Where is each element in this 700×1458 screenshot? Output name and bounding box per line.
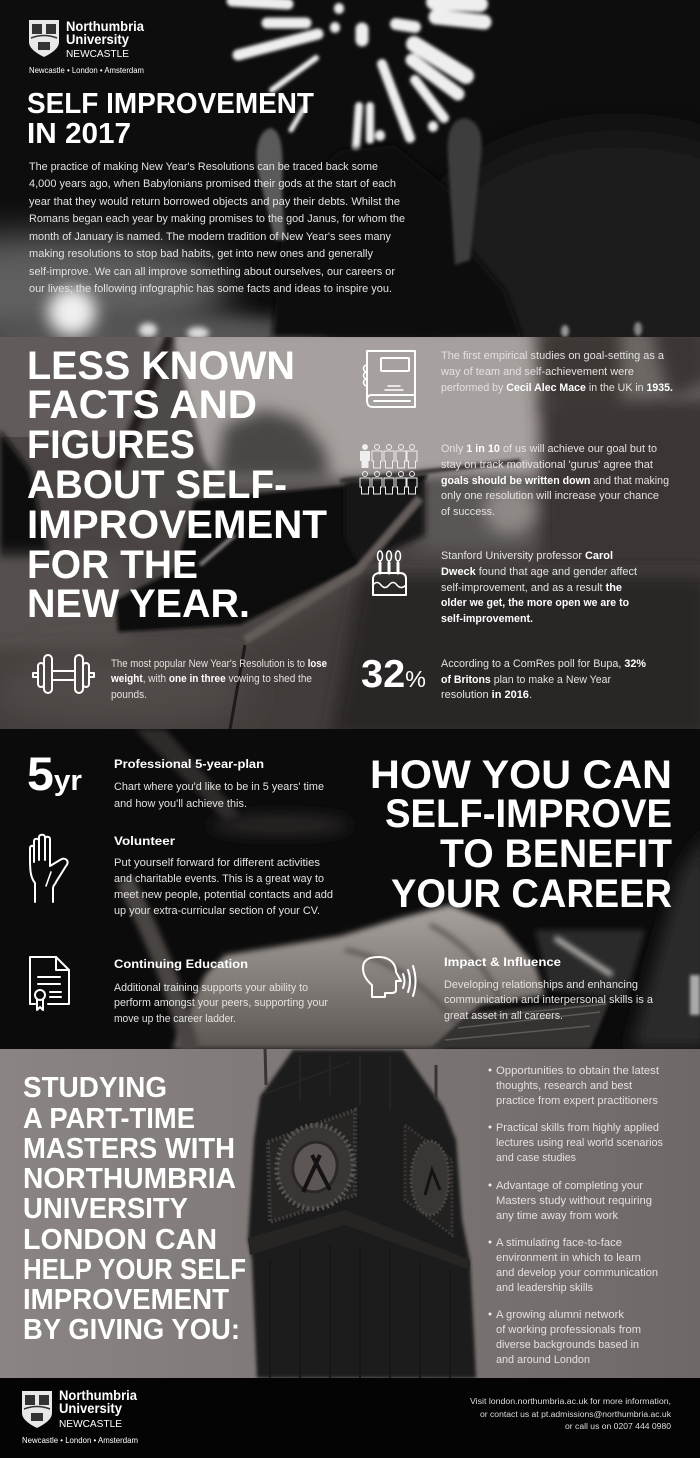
text block: volunteer: meet new people, potential contacts and add — [114, 889, 333, 901]
text block: 32 percent poll: of Britons plan to make a New Year — [441, 674, 611, 686]
list: benefits: and develop your communication — [496, 1267, 658, 1279]
heading: less known facts: FACTS AND — [27, 383, 257, 427]
text block: intro: year that they would return borrowed objects and pay their debts. Whilst the — [29, 196, 400, 208]
text block: 1 in 10: only one resolution will increase your chance — [441, 490, 659, 502]
text block: volunteer: and charitable events. This is a great way to — [114, 873, 324, 885]
text block: contact details: Visit london.northumbria.ac.uk for more information, — [470, 1397, 671, 1406]
text block: professional plan: Chart where you'd like to be in 5 years' time — [114, 781, 324, 793]
text block: impact and influence — [444, 957, 654, 1022]
logo: Northumbria University footer: Newcastle • London • Amsterdam — [22, 1436, 138, 1445]
text block: lose weight: pounds. — [111, 689, 147, 701]
heading: less known facts: FOR THE — [27, 543, 198, 587]
text block: impact and influence: great asset in all careers. — [444, 1010, 563, 1022]
text block: lose weight: weight, with one in three vowing to shed the — [110, 673, 312, 685]
heading: studying a part-time masters: MASTERS WITH — [23, 1133, 235, 1165]
text block: volunteer: up your extra-curricular section of your CV. — [114, 905, 320, 917]
text block: intro: making resolutions to stop bad habits, get into new ones and generally — [29, 248, 373, 260]
list: benefits: any time away from work — [496, 1210, 618, 1222]
list: benefits: and leadership skills — [496, 1282, 593, 1294]
heading: studying a part-time masters: HELP YOUR SELF — [23, 1254, 246, 1286]
text block: lose weight — [110, 658, 327, 701]
heading: how you can self-improve: HOW YOU CAN — [370, 753, 672, 797]
text block: intro — [29, 161, 405, 295]
list: benefits: Practical skills from highly applied — [496, 1122, 659, 1134]
text block: first studies — [440, 350, 673, 394]
heading: studying a part-time masters — [23, 1072, 246, 1346]
icon: ten people, one highlighted — [360, 444, 417, 494]
list: benefits: diverse backgrounds based in — [496, 1339, 639, 1351]
heading: studying a part-time masters: A PART-TIME — [23, 1103, 195, 1135]
text block: Carol Dweck: self-improvement. — [441, 613, 533, 625]
list: benefits: Opportunities to obtain the latest — [496, 1065, 659, 1077]
text block: impact and influence: Developing relationships and enhancing — [444, 979, 638, 991]
text block: lose weight: The most popular New Year's Resolution is to lose — [111, 658, 327, 670]
logo: Northumbria University: NEWCASTLE — [66, 48, 129, 60]
text block: 32 percent poll: resolution in 2016. — [441, 689, 532, 701]
logo: Northumbria University footer: University — [59, 1400, 122, 1416]
highlighted person — [360, 444, 370, 468]
text block: intro: The practice of making New Year's Resolutions can be traced back some — [29, 161, 378, 173]
list: benefits: A growing alumni network — [496, 1309, 625, 1321]
background — [0, 1378, 700, 1458]
text block: 1 in 10: goals should be written down and that making — [441, 475, 669, 487]
text block: first studies: performed by Cecil Alec Mace in the UK in 1935. — [441, 382, 673, 394]
text block: 32 percent poll: According to a ComRes poll for Bupa, 32% — [441, 658, 646, 670]
text block: intro: Romans began each year by making promises to the god Janus, for whom the — [29, 213, 405, 225]
text block: professional plan — [114, 759, 324, 810]
text block: contact details — [470, 1397, 672, 1431]
icon: birthday cake — [373, 551, 406, 595]
text block: Carol Dweck: Dweck found that age and gender affect — [441, 566, 637, 578]
title: IN 2017 — [27, 118, 131, 150]
text block: Carol Dweck — [441, 550, 637, 625]
panel: career — [0, 729, 700, 1049]
logo: Northumbria University footer: NEWCASTLE — [59, 1418, 122, 1430]
list: benefits: and around London — [496, 1354, 590, 1366]
text block: intro: self-improve. We can all improve something about ourselves, our careers or — [29, 266, 395, 278]
icon: speaking head — [363, 957, 416, 997]
text block: Carol Dweck: Stanford University professor Carol — [441, 550, 613, 562]
icon: raised hand — [30, 835, 68, 902]
text block: continuing education: Continuing Education — [114, 959, 248, 971]
text block: Carol Dweck: self-improvement, and as a result the — [441, 582, 622, 594]
heading: less known facts: ABOUT SELF- — [27, 463, 287, 507]
text block: intro: 4,000 years ago, when Babylonians promised their gods at the start of each — [29, 178, 396, 190]
panel: footer — [0, 1378, 700, 1458]
icon: certificate — [30, 957, 69, 1010]
heading: how you can self-improve: YOUR CAREER — [391, 872, 672, 916]
heading: less known facts: LESS KNOWN — [27, 344, 295, 388]
logo: Northumbria University: Newcastle • London • Amsterdam — [29, 66, 144, 75]
text block: 32 percent poll — [441, 658, 646, 701]
list: benefits: of working professionals from — [496, 1324, 641, 1336]
title: SELF IMPROVEMENT — [27, 88, 314, 120]
heading: less known facts — [27, 344, 327, 626]
icon: university shield — [29, 20, 59, 57]
text block: first studies: way of team and self-achievement were — [440, 366, 634, 378]
text block: professional plan: Professional 5-year-plan — [114, 759, 264, 771]
heading: studying a part-time masters: UNIVERSITY — [23, 1193, 188, 1225]
text block: 1 in 10: stay on track motivational 'gurus' agree that — [441, 459, 653, 471]
heading: less known facts: FIGURES — [27, 423, 195, 467]
text block: contact details: or contact us at pt.admissions@northumbria.ac.uk — [480, 1410, 672, 1419]
icon: dumbbell — [33, 655, 94, 693]
heading: studying a part-time masters: LONDON CAN — [23, 1224, 217, 1256]
panel: hero — [0, 0, 700, 337]
text block: impact and influence: Impact & Influence — [444, 957, 561, 969]
text block: intro: our lives; the following infographic has some facts and ideas to inspire you. — [29, 283, 392, 295]
heading: how you can self-improve — [372, 760, 672, 908]
heading: studying a part-time masters: STUDYING — [23, 1072, 167, 1104]
list: benefits: A stimulating face-to-face — [496, 1237, 622, 1249]
text block: 1 in 10: of success. — [441, 506, 495, 518]
text block: first studies: The first empirical studies on goal-setting as a — [441, 350, 665, 362]
photo: blurred shoe and road — [0, 325, 700, 750]
logo: Northumbria University — [29, 18, 144, 75]
text block: Carol Dweck: older we get, the more open we are to — [441, 597, 629, 609]
photo: hands on laptop — [0, 729, 700, 1049]
list: benefits: Masters study without requiring — [496, 1195, 652, 1207]
heading: studying a part-time masters: NORTHUMBRIA — [23, 1163, 236, 1195]
photo: fireworks and raised arms — [0, 0, 700, 337]
icon: notebook — [364, 351, 415, 407]
text block: contact details: or call us on 0207 444 0980 — [565, 1422, 672, 1431]
panel: studying part-time masters — [0, 1047, 700, 1378]
list: benefits — [488, 1065, 663, 1366]
icon: university shield footer — [22, 1391, 52, 1428]
list: benefits: Advantage of completing your — [496, 1180, 643, 1192]
list: benefits: practice from expert practitioners — [496, 1095, 659, 1107]
text block: continuing education: Additional training supports your ability to — [114, 982, 308, 994]
panel: less known facts — [0, 325, 700, 750]
text block: continuing education: move up the career ladder. — [114, 1013, 236, 1025]
photo: Big Ben clock tower — [248, 1047, 476, 1378]
logo: Northumbria University: University — [66, 31, 129, 47]
list: benefits: thoughts, research and best — [496, 1080, 632, 1092]
stat: 5yr: 5yr — [27, 747, 82, 800]
heading: studying a part-time masters: IMPROVEMENT — [23, 1284, 229, 1316]
heading: studying a part-time masters: BY GIVING YOU: — [23, 1314, 240, 1346]
text block: volunteer: Volunteer — [114, 836, 176, 848]
list: benefits: environment in which to learn — [496, 1252, 641, 1264]
text block: 1 in 10: Only 1 in 10 of us will achieve our goal but to — [441, 443, 657, 455]
text block: volunteer: Put yourself forward for different activities — [114, 857, 320, 869]
background — [0, 1049, 700, 1378]
text block: volunteer — [114, 836, 333, 917]
stat: 32%: 32% — [361, 653, 426, 696]
logo: Northumbria University: Northumbria — [66, 18, 144, 34]
list: benefits: and case studies — [496, 1152, 576, 1164]
list: benefits: lectures using real world scenarios — [496, 1137, 663, 1149]
text block: 1 in 10 — [441, 443, 669, 518]
text block: continuing education — [114, 959, 328, 1025]
heading: less known facts: IMPROVEMENT — [27, 503, 327, 547]
title — [28, 92, 314, 144]
text block: professional plan: and how you'll achieve this. — [114, 798, 247, 810]
heading: less known facts: NEW YEAR. — [27, 582, 250, 626]
text block: intro: month of January is named. The modern tradition of New Year's sees many — [29, 231, 391, 243]
logo: Northumbria University footer: Northumbria — [59, 1387, 137, 1403]
heading: how you can self-improve: SELF-IMPROVE — [385, 792, 672, 836]
text block: continuing education: perform amongst your peers, supporting your — [114, 997, 328, 1009]
heading: how you can self-improve: TO BENEFIT — [440, 832, 672, 876]
logo: Northumbria University footer — [22, 1387, 138, 1445]
text block: impact and influence: communication and interpersonal skills is a — [444, 994, 654, 1006]
